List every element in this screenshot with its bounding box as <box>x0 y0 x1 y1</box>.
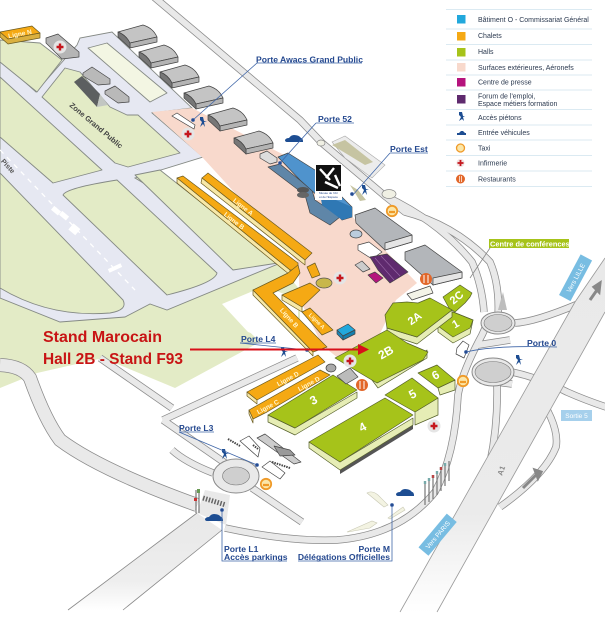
Ligne C <box>249 370 330 423</box>
roundabout: north-east <box>481 312 515 334</box>
legend: Entree vehicules: Entrée véhicules <box>478 130 530 137</box>
leader lines <box>179 63 557 561</box>
hall 3: 3 <box>307 392 320 408</box>
road sign: Vers PARIS: Vers PARIS <box>425 520 452 551</box>
restaurant markers <box>356 273 432 391</box>
label: A1: A1 <box>495 465 507 477</box>
hall 2C <box>443 285 472 312</box>
legend: Restaurants <box>456 174 516 184</box>
Centre de conferences label: Centre de conférences <box>490 240 570 248</box>
gate labels: Porte Awacs Grand Public <box>256 54 363 64</box>
Ligne C: Ligne C <box>256 399 281 416</box>
hall 2B <box>335 330 428 388</box>
legend: Surfaces: Surfaces extérieures, Aéronefs <box>478 65 574 72</box>
gate labels <box>179 54 556 562</box>
road sign: Sortie 5: Sortie 5 <box>565 413 588 420</box>
halls <box>268 285 473 474</box>
road: south-west exit <box>68 513 222 610</box>
hall 4: 4 <box>356 419 369 435</box>
structure near hall 3 <box>326 364 358 384</box>
road sign: Vers LILLE: Vers LILLE <box>566 262 587 294</box>
Ligne A: Ligne A <box>231 197 254 218</box>
legend: Chalets <box>457 32 502 40</box>
legend: Centre de presse: Centre de presse <box>478 80 532 86</box>
legend: Batiment O <box>457 15 589 24</box>
pink exterior surfaces <box>152 108 417 358</box>
island: lower left <box>0 173 124 314</box>
legend: Infirmerie <box>456 159 507 168</box>
legend: Acces pietons: Accès piétons <box>478 115 522 122</box>
ramp triangle <box>498 292 507 310</box>
Musee de l'Air sign <box>315 164 342 200</box>
Forum de l'emploi: purple <box>370 254 408 283</box>
runway markings <box>0 150 135 290</box>
road: Porte L1 junction <box>197 490 230 525</box>
gate labels: Porte L3 <box>179 423 214 433</box>
legend: Taxi <box>456 144 491 152</box>
legend: Restaurants: Restaurants <box>478 176 516 184</box>
green airfield zone <box>0 43 300 388</box>
hall 1 <box>438 312 473 343</box>
hall 2A: 2A <box>406 310 424 328</box>
Ligne A <box>201 173 312 265</box>
road: left curve <box>0 365 197 505</box>
hall 1: 1 <box>450 318 462 331</box>
flags Porte M <box>425 461 449 505</box>
Ligne N <box>0 26 40 44</box>
legend: Forum: Espace métiers formation <box>478 101 557 108</box>
label: Zone Grand Public: Zone Grand Public <box>68 101 125 150</box>
gate labels: Porte M <box>358 544 390 554</box>
chalet: small <box>307 263 320 278</box>
legend: Acces pietons <box>459 112 522 122</box>
island: Zone Grand Public <box>42 68 180 167</box>
legend: Halls <box>457 48 494 56</box>
legend: Halls: Halls <box>478 49 494 56</box>
hall 2A <box>385 298 452 344</box>
gate labels: Porte L4 <box>241 334 276 344</box>
structures near Porte L3 <box>228 434 301 479</box>
legend: Forum: Forum de l'emploi, <box>478 94 535 100</box>
legend: Taxi: Taxi <box>478 146 491 152</box>
hall 3 <box>268 375 357 435</box>
Musee de l'Air sign: et de l'Espace <box>319 195 338 199</box>
hall 4 <box>309 398 413 474</box>
Porte M islands <box>347 492 405 532</box>
small gray building <box>46 34 79 59</box>
hall 2C: 2C <box>448 289 466 307</box>
callout: Stand Marocain <box>43 329 183 368</box>
legend: Surfaces <box>457 63 574 72</box>
Musee de l'Air sign: Musée de l'Air <box>319 191 338 195</box>
Centre de presse: magenta <box>368 272 383 283</box>
parking area near Porte Est <box>317 136 396 201</box>
legend: Chalets: Chalets <box>478 33 502 40</box>
road sign: Vers LILLE <box>559 254 592 301</box>
Ligne B lower: Ligne B <box>278 307 299 330</box>
gray exhibition buildings <box>316 208 462 300</box>
Ligne C: Ligne D <box>297 376 322 393</box>
crosswalk <box>203 498 226 505</box>
Ligne A lower <box>302 308 333 335</box>
legend: Centre de presse <box>457 78 532 86</box>
gate labels: Porte 52 <box>318 114 352 124</box>
gate labels: Porte 0 <box>527 338 556 348</box>
taxi markers <box>261 206 468 489</box>
roundabout: east <box>472 358 514 386</box>
A1 motorway <box>400 258 605 612</box>
hangars <box>118 25 273 154</box>
museum building: Porte 52 <box>260 151 352 225</box>
hall 2B: 2B <box>376 342 396 362</box>
taxiways and runway <box>0 32 278 322</box>
hall 5: 5 <box>406 386 419 402</box>
flags Porte L1 <box>194 489 200 513</box>
hall 6 <box>418 365 455 395</box>
island: top left <box>0 40 62 92</box>
Ligne D <box>247 355 325 404</box>
legend: Batiment O: Bâtiment O - Commissariat Général <box>478 17 589 24</box>
legend: Infirmerie: Infirmerie <box>478 160 507 168</box>
gate labels: Accès parkings <box>224 552 288 562</box>
Ligne B: Ligne B <box>222 211 245 232</box>
orange chalets <box>0 26 333 423</box>
Ligne B lower <box>253 265 327 356</box>
Ligne B <box>177 176 298 275</box>
building near Porte 0 <box>456 341 469 358</box>
motorway arrows <box>523 283 600 488</box>
roundabout: Porte L3 <box>213 459 259 493</box>
Ligne A lower: Ligne A <box>307 313 326 331</box>
island: centre <box>63 180 217 295</box>
chalet: block <box>282 283 320 312</box>
arrow to hall 2B <box>190 344 369 355</box>
white notch <box>222 286 298 350</box>
road sign: Sortie 5 <box>561 410 592 421</box>
gate labels: Porte Est <box>390 144 428 154</box>
road sign: Vers PARIS <box>418 514 457 556</box>
island: pale apron <box>88 43 167 102</box>
hall 5 <box>385 378 438 425</box>
Ligne D: Ligne D <box>276 371 301 388</box>
legend <box>446 10 592 186</box>
gate labels: Délégations Officielles <box>298 552 390 562</box>
pedestrian and vehicle icons <box>200 117 523 521</box>
callout: Stand Marocain: Stand Marocain <box>43 329 162 346</box>
island: right <box>135 170 278 270</box>
Ligne N: Ligne N <box>8 29 33 40</box>
Zone Grand Public buildings <box>74 67 195 129</box>
Batiment O: blue cube <box>337 324 355 340</box>
legend: Forum <box>457 94 557 108</box>
hall 6: 6 <box>429 367 442 383</box>
callout: Stand Marocain: Hall 2B - Stand F93 <box>43 351 183 368</box>
gate labels: Porte L1 <box>224 544 259 554</box>
island: mid left <box>0 77 102 183</box>
infirmary markers <box>54 40 440 432</box>
